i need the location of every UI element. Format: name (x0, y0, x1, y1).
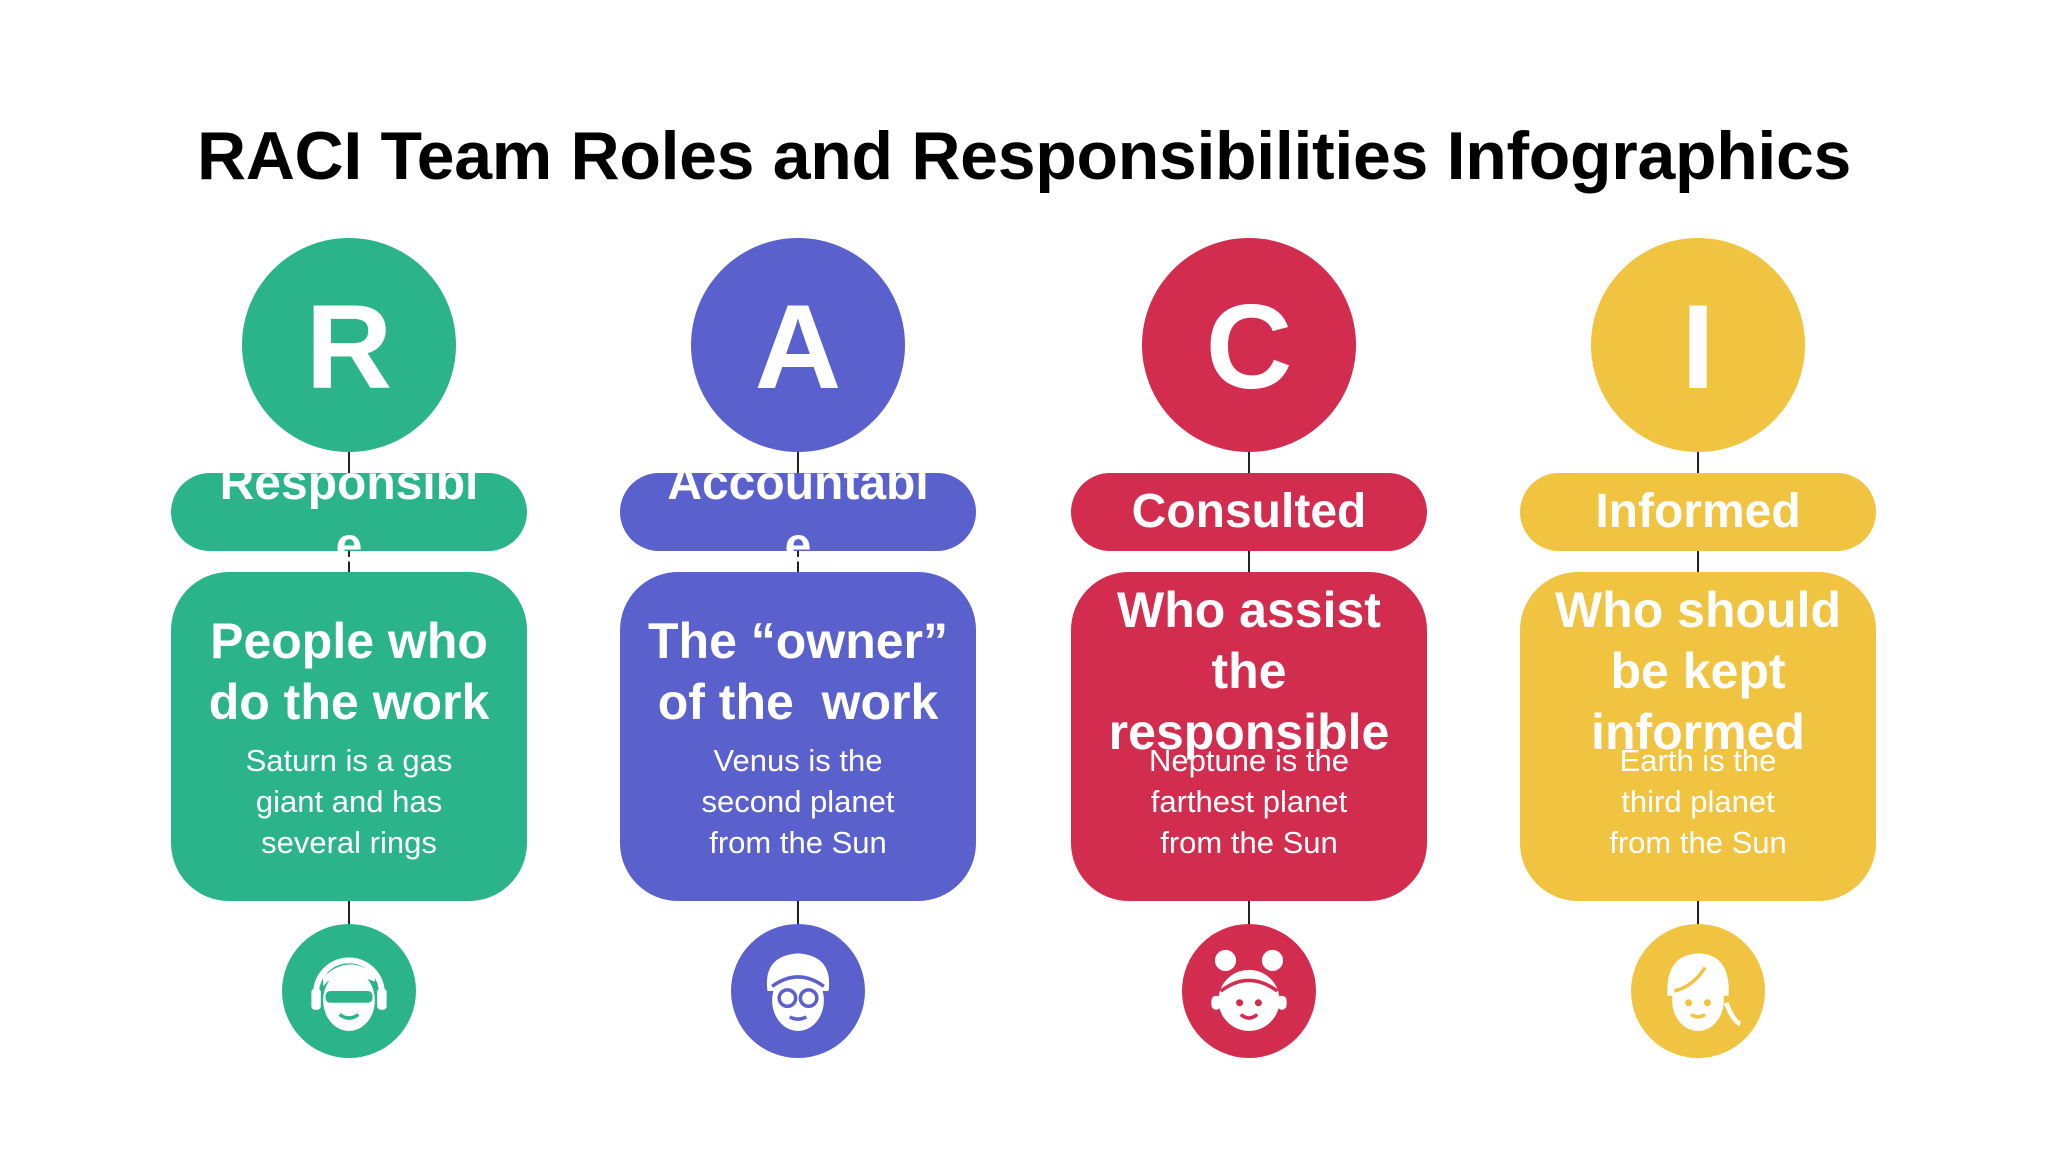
headline: Who should (1555, 582, 1841, 638)
description text: farthest planet (1151, 784, 1347, 819)
label pill: Consulted (1071, 473, 1427, 551)
title: RACI Team Roles and Responsibilities Infographics (197, 118, 1851, 194)
letter circle A: A (755, 280, 841, 414)
label pill: Accountable (620, 473, 976, 551)
description text: Neptune is the (1149, 743, 1349, 778)
label pill: Responsible (171, 473, 527, 551)
description box (1071, 572, 1427, 901)
panel: accountable (620, 238, 976, 1058)
headline: the (1212, 643, 1286, 699)
description text (1609, 743, 1787, 860)
description text: several rings (261, 825, 437, 860)
letter circle I (1591, 238, 1805, 452)
description box (1520, 572, 1876, 901)
description text: Venus is the (714, 743, 882, 778)
icon: woman with headset (1631, 924, 1765, 1058)
description text: third planet (1621, 784, 1775, 819)
label pill: Responsible: Responsibl (220, 457, 478, 510)
icon: person with glasses (731, 924, 865, 1058)
icon: person with headphones (282, 924, 416, 1058)
description text (1149, 743, 1349, 860)
description text: from the Sun (1160, 825, 1338, 860)
letter circle R: R (306, 280, 392, 414)
headline (1555, 582, 1841, 760)
letter circle A (691, 238, 905, 452)
description text: giant and has (256, 784, 442, 819)
headline (648, 613, 948, 730)
description text: second planet (701, 784, 895, 819)
panel: responsible (171, 238, 527, 1058)
headline: The “owner” (648, 613, 948, 669)
description text (246, 743, 452, 860)
headline: People who (210, 613, 488, 669)
label pill: Informed: Informed (1595, 485, 1801, 538)
description text (701, 743, 895, 860)
headline: of the work (658, 674, 938, 730)
headline: Who assist (1117, 582, 1381, 638)
label pill: Consulted: Consulted (1132, 485, 1366, 538)
description text: from the Sun (709, 825, 887, 860)
panel: consulted (1071, 238, 1427, 1058)
description box (171, 572, 527, 901)
letter circle C (1142, 238, 1356, 452)
label pill: Informed (1520, 473, 1876, 551)
letter circle C: C (1206, 280, 1292, 414)
description text: from the Sun (1609, 825, 1787, 860)
headline: do the work (209, 674, 489, 730)
description text: Saturn is a gas (246, 743, 452, 778)
label pill: Responsible: e (336, 519, 362, 572)
label pill: Accountable: Accountabl (667, 457, 929, 510)
letter circle I: I (1681, 280, 1715, 414)
letter circle R (242, 238, 456, 452)
panel: informed (1520, 238, 1876, 1058)
headline: be kept (1610, 643, 1786, 699)
headline (209, 613, 490, 730)
headline: informed (1591, 704, 1805, 760)
label pill: Accountable: e (785, 519, 811, 572)
description text: Earth is the (1620, 743, 1776, 778)
headline: responsible (1109, 704, 1389, 760)
headline (1109, 582, 1389, 760)
icon: girl with buns (1182, 924, 1316, 1058)
description box (620, 572, 976, 901)
